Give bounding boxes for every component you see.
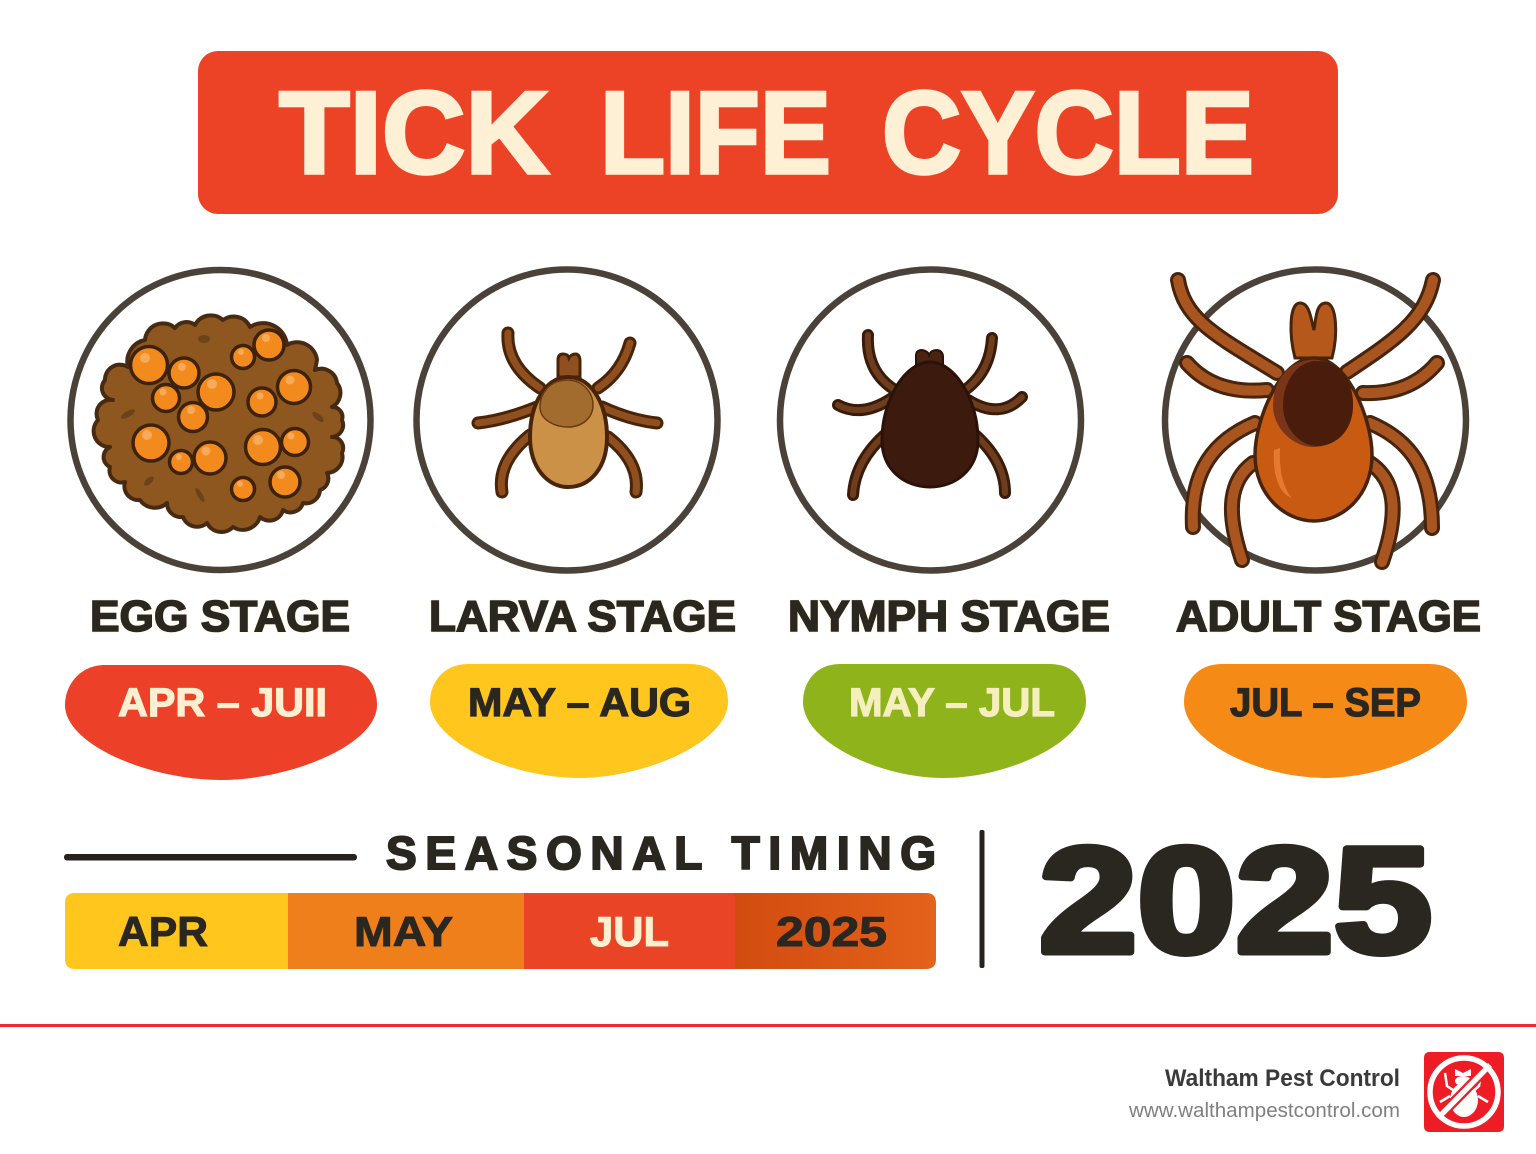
footer website: www.walthampestcontrol.com (1128, 1100, 1400, 1122)
timeline bar: 2025 (776, 908, 887, 955)
panel: seasonal timing (64, 827, 936, 969)
timeline bar: APR (118, 908, 208, 955)
egg stage label: EGG STAGE (90, 592, 350, 641)
adult stage label: ADULT STAGE (1176, 592, 1481, 641)
egg circle (70, 270, 370, 570)
larva date pill (430, 664, 728, 778)
adult date pill: JUL – SEP (1230, 681, 1421, 725)
timeline bar (65, 893, 936, 969)
nymph date pill: MAY – JUL (849, 681, 1055, 725)
adult date pill (1184, 664, 1467, 778)
panel: egg stage (65, 270, 377, 780)
egg date pill: APR – JUII (118, 681, 327, 725)
panel: nymph stage (780, 270, 1110, 778)
icon: larva tick (478, 333, 657, 492)
icon: egg cluster (94, 315, 343, 532)
footer company name: Waltham Pest Control (1165, 1065, 1400, 1092)
icon: no-pest logo (1424, 1052, 1504, 1132)
title text: LIFE (600, 67, 831, 198)
adult circle (1165, 270, 1466, 570)
nymph stage label: NYMPH STAGE (788, 592, 1110, 641)
larva circle (416, 270, 718, 570)
year 2025: 2025 (1039, 816, 1432, 984)
nymph circle (780, 270, 1081, 570)
larva date pill: MAY – AUG (468, 681, 691, 725)
panel: larva stage (416, 270, 736, 778)
footer rule (0, 1024, 1536, 1027)
title text (279, 67, 1254, 198)
egg date pill (65, 665, 377, 780)
larva stage label: LARVA STAGE (429, 592, 736, 641)
title text: TICK (279, 67, 549, 198)
seasonal timing heading: SEASONAL TIMING (386, 827, 936, 879)
title banner (198, 51, 1338, 214)
title text: CYCLE (882, 67, 1254, 198)
timeline bar: MAY (354, 908, 453, 955)
nymph date pill (803, 664, 1086, 778)
divider bar (980, 830, 984, 968)
icon: nymph tick (838, 335, 1022, 495)
timeline bar: JUL (590, 908, 669, 955)
icon: adult tick (1178, 280, 1437, 562)
panel: adult stage (1165, 270, 1481, 778)
